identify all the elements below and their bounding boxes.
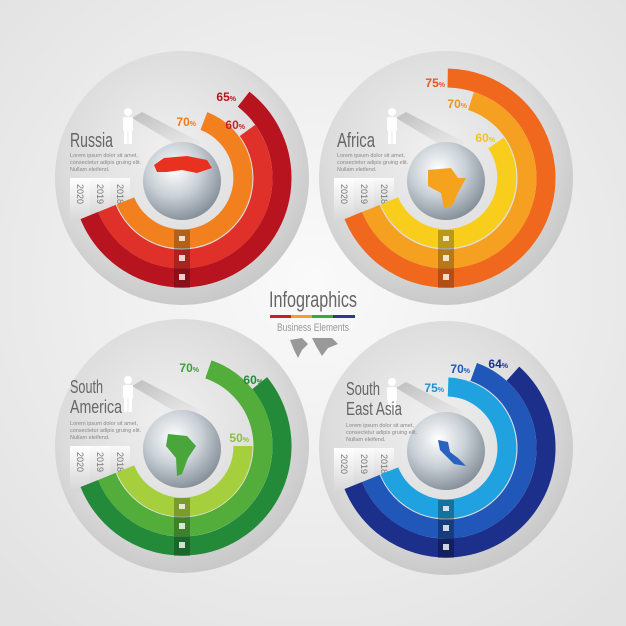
icon strip bbox=[438, 500, 454, 558]
year tabs: 2018 bbox=[379, 454, 389, 474]
percent labels: 60% bbox=[475, 131, 496, 145]
title bbox=[346, 379, 403, 419]
percent labels: 75% bbox=[424, 381, 445, 395]
year tabs: 2018 bbox=[379, 184, 389, 204]
body text bbox=[70, 153, 142, 173]
year tabs: 2018 bbox=[115, 184, 125, 204]
icon strip bbox=[174, 230, 190, 288]
year tabs: 2019 bbox=[359, 454, 369, 474]
body text: Lorem ipsum dolor sit amet, bbox=[346, 423, 414, 429]
year tabs bbox=[70, 178, 130, 223]
body text: Lorem ipsum dolor sit amet, bbox=[70, 153, 138, 159]
year tabs: 2018 bbox=[115, 452, 125, 472]
body text: Lorem ipsum dolor sit amet, bbox=[70, 421, 138, 427]
percent labels: 70% bbox=[450, 362, 471, 376]
person icon bbox=[387, 108, 397, 144]
year tabs: 2020 bbox=[339, 454, 349, 474]
year tabs bbox=[334, 178, 394, 223]
title: South bbox=[346, 379, 380, 399]
body text bbox=[337, 153, 409, 173]
year tabs bbox=[334, 448, 394, 493]
percent labels: 64% bbox=[488, 357, 509, 371]
center title: Business Elements bbox=[277, 322, 349, 334]
percent labels bbox=[176, 90, 246, 132]
year tabs bbox=[70, 446, 130, 491]
body text: Nullam eleifend. bbox=[337, 167, 377, 173]
ring arcs bbox=[89, 99, 282, 278]
globe bbox=[143, 142, 221, 220]
percent labels: 65% bbox=[216, 90, 237, 104]
icon: world map bbox=[290, 338, 338, 358]
ring arcs bbox=[89, 369, 282, 546]
percent labels bbox=[424, 357, 509, 395]
center title: Infographics bbox=[269, 287, 357, 312]
body text: consectetur adipis gruing elit. bbox=[70, 160, 142, 166]
year tabs: 2020 bbox=[75, 452, 85, 472]
percent labels: 60% bbox=[225, 118, 246, 132]
title: America bbox=[70, 397, 123, 417]
percent labels: 70% bbox=[179, 361, 200, 375]
percent labels: 70% bbox=[447, 97, 468, 111]
percent labels bbox=[425, 76, 496, 145]
globe bbox=[143, 410, 221, 488]
body text: Nullam eleifend. bbox=[346, 437, 386, 443]
title: South bbox=[70, 377, 103, 397]
body text: Lorem ipsum dolor sit amet, bbox=[337, 153, 405, 159]
person icon bbox=[123, 108, 133, 144]
body text: Nullam eleifend. bbox=[70, 167, 110, 173]
body text bbox=[346, 423, 418, 443]
body text bbox=[70, 421, 142, 441]
person icon bbox=[123, 376, 133, 412]
title bbox=[70, 377, 123, 417]
body text: consectetur adipis gruing elit. bbox=[337, 160, 409, 166]
percent labels: 50% bbox=[229, 431, 250, 445]
panel: Russia bbox=[55, 51, 309, 305]
title: Africa bbox=[337, 130, 376, 152]
percent labels: 70% bbox=[176, 115, 197, 129]
title: East Asia bbox=[346, 399, 403, 419]
panel: Africa bbox=[319, 51, 573, 305]
globe bbox=[407, 142, 485, 220]
ring arcs bbox=[353, 78, 546, 278]
panel: South East Asia bbox=[319, 321, 573, 575]
icon strip bbox=[174, 498, 190, 556]
body text: consectetur adipis gruing elit. bbox=[70, 428, 142, 434]
title: Russia bbox=[70, 130, 114, 152]
person icon bbox=[387, 378, 397, 414]
year tabs: 2020 bbox=[75, 184, 85, 204]
percent labels: 75% bbox=[425, 76, 446, 90]
ring arcs bbox=[353, 372, 546, 548]
percent labels bbox=[179, 361, 264, 445]
panel: South America bbox=[55, 319, 309, 573]
year tabs: 2019 bbox=[95, 184, 105, 204]
globe bbox=[407, 412, 485, 490]
year tabs: 2019 bbox=[95, 452, 105, 472]
center title bbox=[269, 287, 357, 358]
body text: consectetur adipis gruing elit. bbox=[346, 430, 418, 436]
percent labels: 60% bbox=[243, 373, 264, 387]
year tabs: 2019 bbox=[359, 184, 369, 204]
body text: Nullam eleifend. bbox=[70, 435, 110, 441]
icon strip bbox=[438, 230, 454, 288]
year tabs: 2020 bbox=[339, 184, 349, 204]
